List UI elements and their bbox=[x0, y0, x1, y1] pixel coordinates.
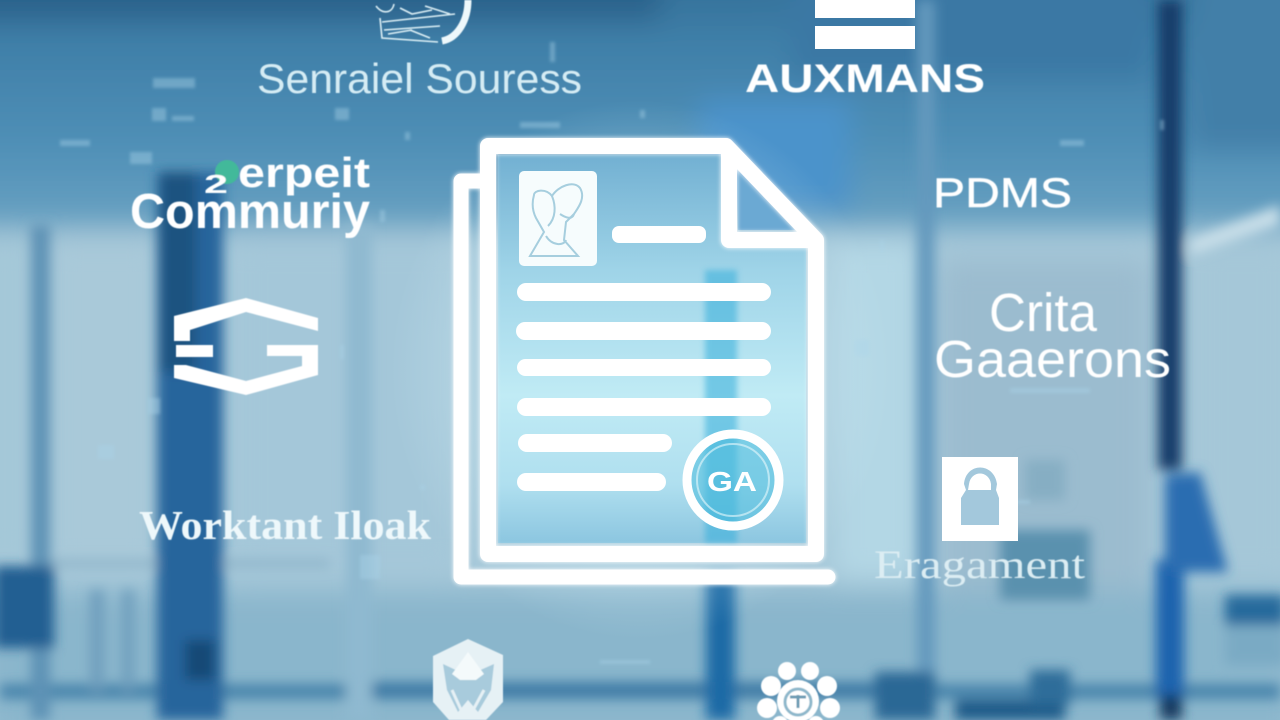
document outline bbox=[461, 146, 828, 577]
label: Expert Community: erpeit bbox=[238, 149, 370, 196]
data particles bbox=[60, 42, 1164, 664]
seal: GA bbox=[707, 466, 757, 497]
label: Expert Community: 2 bbox=[204, 169, 228, 199]
heading bar bbox=[612, 226, 706, 243]
portrait card bbox=[519, 171, 597, 266]
icon: flower badge bbox=[757, 662, 840, 720]
icon: auxmans bars bbox=[815, 0, 915, 49]
label: Eragament: Eragament bbox=[874, 542, 1085, 587]
seal bbox=[687, 434, 779, 526]
icon: padlock bbox=[942, 457, 1018, 541]
label: Auxmans: AUXMANS bbox=[745, 57, 985, 101]
document sheet fill bbox=[498, 155, 806, 543]
icon: shield bbox=[433, 639, 503, 720]
central document icon bbox=[390, 100, 890, 640]
label: Expert Community bbox=[130, 149, 370, 239]
label: PDMS: PDMS bbox=[933, 169, 1072, 216]
text lines bbox=[516, 283, 771, 491]
label: Crita Gaaerons bbox=[934, 283, 1171, 389]
label: Senraiel Soures: Senraiel Souress bbox=[257, 55, 582, 102]
icon: hexagon G bbox=[174, 298, 318, 395]
label: Workant Rook: Worktant Iloak bbox=[139, 502, 431, 548]
document halo bbox=[390, 100, 890, 640]
label: Crita Gaaerons: Crita bbox=[989, 283, 1098, 343]
icon: stylised top illustration bbox=[376, 0, 468, 42]
label: Expert Community: Commuriy bbox=[130, 185, 370, 239]
label: Crita Gaaerons: Gaaerons bbox=[934, 331, 1171, 389]
